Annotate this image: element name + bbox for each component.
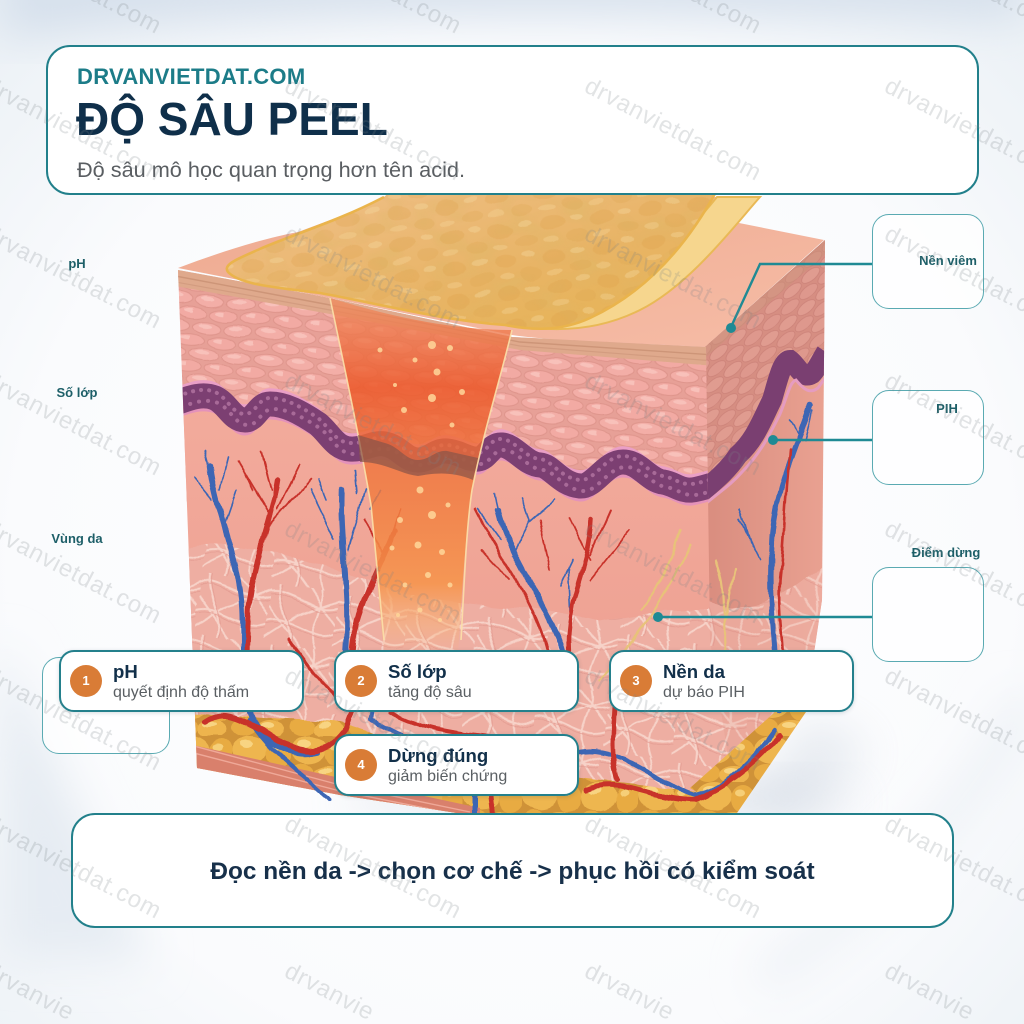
leader: PIH [768, 435, 872, 445]
label: inflammation base: Nền viêm [919, 253, 977, 268]
watermark: drvanvietdat.com [580, 810, 766, 925]
leader: stopping point [653, 612, 872, 622]
skin top surface [178, 197, 824, 347]
fat layer on side corner [690, 712, 806, 816]
watermark: drvanvietdat.com [280, 72, 466, 187]
badge 4 [345, 749, 377, 781]
badge 1: 1 [82, 673, 90, 688]
card 4 text: giảm biến chứng [388, 768, 507, 785]
bottom summary panel: Đọc nền da -> chọn cơ chế -> phục hồi có kiểm soát [210, 858, 815, 885]
header panel [46, 45, 979, 195]
card 4 title: Dừng đúng [388, 745, 488, 766]
epidermis cells [170, 262, 720, 502]
card 3 title: Nền da [663, 661, 725, 682]
badge 2: 2 [357, 673, 365, 688]
callout box: stopping point [872, 567, 984, 662]
watermark: drvanvietdat.com [580, 662, 766, 777]
collagen net [170, 544, 730, 815]
card 2 title: Số lớp [388, 661, 447, 682]
badge 3 [620, 665, 652, 697]
fat layer [170, 712, 740, 815]
leader: inflammation base [726, 264, 872, 333]
left label: number of layers: Số lớp [56, 385, 98, 400]
front face layers [170, 262, 740, 820]
badge 4: 4 [357, 757, 365, 772]
card 1 text: quyết định độ thấm [113, 684, 249, 701]
label: PIH: PIH [936, 401, 958, 416]
callout box: PIH [872, 390, 984, 485]
left label: skin zone: Vùng da [51, 531, 103, 546]
blood vessels and nerves [194, 405, 812, 815]
badge 1 [70, 665, 102, 697]
watermark: drvanvietdat.com [280, 662, 466, 777]
acid penetration column [330, 298, 512, 655]
stratum corneum [170, 265, 715, 366]
dermis [170, 396, 720, 820]
badge 3: 3 [632, 673, 640, 688]
card 2 text: tăng độ sâu [388, 684, 472, 701]
watermark: drvanvietdat.com [280, 515, 466, 630]
card 3: skin base [609, 650, 854, 712]
watermark: drvanvietdat.com [580, 72, 766, 187]
skin block illustration [178, 195, 825, 813]
card 3 text: dự báo PIH [663, 684, 745, 701]
side face of block [705, 240, 825, 754]
callout box: inflammation base [872, 214, 984, 309]
site name: DRVANVIETDAT.COM [77, 64, 305, 89]
card 4: stop correctly [334, 734, 579, 796]
card 2: layers [334, 650, 579, 712]
acid peel sheet [220, 190, 760, 335]
watermark: drvanvietdat.com [280, 810, 466, 925]
label: stopping point: Điểm dừng [912, 545, 980, 560]
card 1 title: pH [113, 661, 138, 682]
watermark: drvanvietdat.com [280, 220, 466, 335]
subtitle: Độ sâu mô học quan trọng hơn tên acid. [77, 157, 465, 182]
title: ĐỘ SÂU PEEL [76, 93, 388, 145]
watermark: drvanvietdat.com [280, 367, 466, 482]
left label: pH: pH [68, 256, 86, 271]
badge 2 [345, 665, 377, 697]
watermark: drvanvietdat.com [580, 220, 766, 335]
bottom summary panel [71, 813, 954, 928]
basal layer band [170, 382, 719, 504]
watermark: drvanvietdat.com [580, 515, 766, 630]
muscle strip [196, 746, 480, 813]
card 1: pH [59, 650, 304, 712]
watermark: drvanvietdat.com [580, 367, 766, 482]
callout box: empty left [42, 657, 170, 754]
